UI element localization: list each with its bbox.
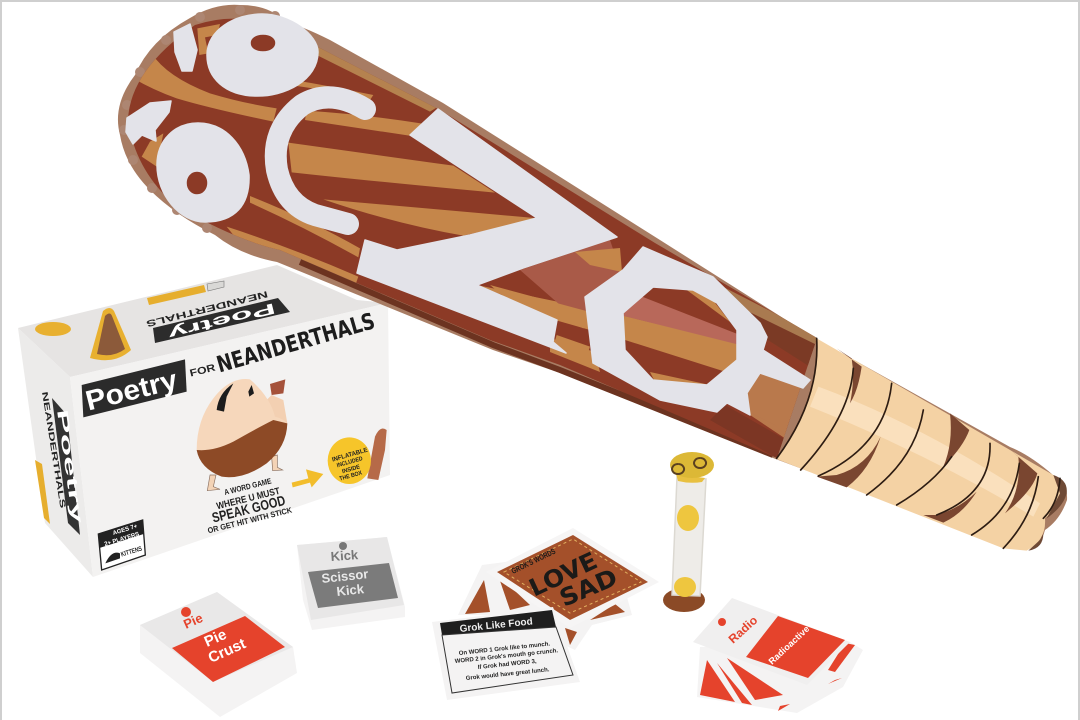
timer sand: [674, 505, 699, 597]
letter O: [585, 247, 810, 415]
publisher badge: AGES 7+: [112, 524, 139, 537]
tagline: WHERE U MUST: [215, 486, 281, 512]
inflatable callout: [328, 428, 387, 484]
gray deck: Kick: Scissor: [321, 566, 369, 586]
Grok Like Food card: WORD 2 in Grok's mouth go crunch.: [455, 648, 559, 665]
title: Poetry: [82, 364, 181, 416]
box top artwork: Poetry: [165, 299, 277, 343]
top brown card: GROK'S WORDS: [510, 546, 557, 576]
Grok Like Food card: If Grok had WORD 3,: [478, 659, 537, 671]
top Radio card: [693, 598, 850, 685]
inflatable callout: THE BOX: [339, 470, 363, 483]
tagline: SPEAK GOOD: [210, 492, 287, 526]
top brown card: SAD: [555, 563, 622, 613]
box side artwork: Poetry: [53, 408, 86, 526]
sand timer: [663, 452, 714, 612]
club stripes: [128, 18, 816, 458]
top brown card: [486, 528, 659, 628]
box side artwork: NEANDERTHALS: [40, 391, 68, 510]
inflatable callout: INSIDE: [342, 464, 361, 475]
small mark: [126, 101, 171, 144]
club lower dark seam: [300, 262, 773, 455]
Grok Like Food card: On WORD 1 Grok like to munch.: [459, 641, 551, 657]
club lettering: [126, 14, 810, 415]
eye mark two: [157, 123, 249, 222]
box side face: [18, 328, 93, 577]
top Radio card: Radioactive: [767, 624, 811, 666]
top Radio card: Radio: [726, 613, 760, 646]
character: [197, 379, 287, 491]
arrow: [292, 469, 323, 487]
tape body: [777, 338, 1067, 551]
inflatable club: [100, 0, 1067, 551]
box top face: [18, 265, 388, 377]
timer tube: [672, 477, 706, 596]
title: NEANDERTHALS: [214, 308, 378, 378]
red deck: Pie: Crust: [206, 635, 248, 667]
tape end cap: [1028, 475, 1067, 551]
timer cap: [670, 452, 714, 483]
letter C: [276, 97, 365, 224]
publisher badge: KITTENS: [120, 545, 143, 559]
red deck: Pie: Pie: [202, 626, 229, 651]
inflatable callout: INFLATABLE: [331, 447, 368, 464]
scalloped head edge: [119, 5, 280, 233]
fanned lower cards: [697, 642, 863, 713]
club outer seam: [118, 5, 1067, 548]
tape highlight: [810, 387, 1040, 517]
gaps between tape wraps: [817, 348, 1037, 523]
box front face: [70, 303, 390, 577]
tagline: OR GET HIT WITH STICK: [207, 506, 293, 535]
tagline: [207, 476, 293, 535]
eye mark one: [207, 14, 318, 96]
Grok Like Food card: Grok would have great lunch.: [466, 667, 550, 682]
dash mark: [174, 24, 197, 71]
title: [82, 308, 378, 417]
box side artwork: [35, 391, 86, 535]
stripes between Z and O: [490, 240, 622, 372]
timer base: [663, 588, 705, 612]
brown word cards fan: [432, 528, 659, 700]
stripes right of the O: [710, 288, 816, 458]
handle tape: [777, 338, 1067, 551]
tagline: A WORD GAME: [223, 476, 273, 497]
red deck: Pie: [140, 592, 297, 717]
top brown card: LOVE: [525, 547, 602, 602]
inflatable callout: INCLUDED: [336, 456, 364, 469]
Grok Like Food card: [432, 607, 580, 700]
gray deck: Kick: Kick: [330, 547, 359, 564]
stripes inside the O: [624, 290, 736, 384]
publisher badge: 2+ PLAYERS: [104, 532, 140, 548]
box front artwork: [82, 308, 387, 570]
gray deck: Kick: Kick: [336, 581, 365, 599]
title: FOR: [189, 363, 217, 380]
box top artwork: NEANDERTHALS: [145, 289, 269, 329]
game box: [18, 265, 390, 577]
Grok Like Food card: Grok Like Food: [459, 616, 533, 635]
gray deck: Kick: [297, 537, 405, 630]
under cards: [458, 560, 632, 650]
tape edge lines: [777, 338, 1060, 548]
publisher badge: [98, 520, 145, 570]
box top artwork: [35, 281, 290, 360]
red deck: Pie: Pie: [181, 610, 205, 632]
letter Z: [357, 109, 617, 353]
red cards fan: [693, 598, 863, 713]
